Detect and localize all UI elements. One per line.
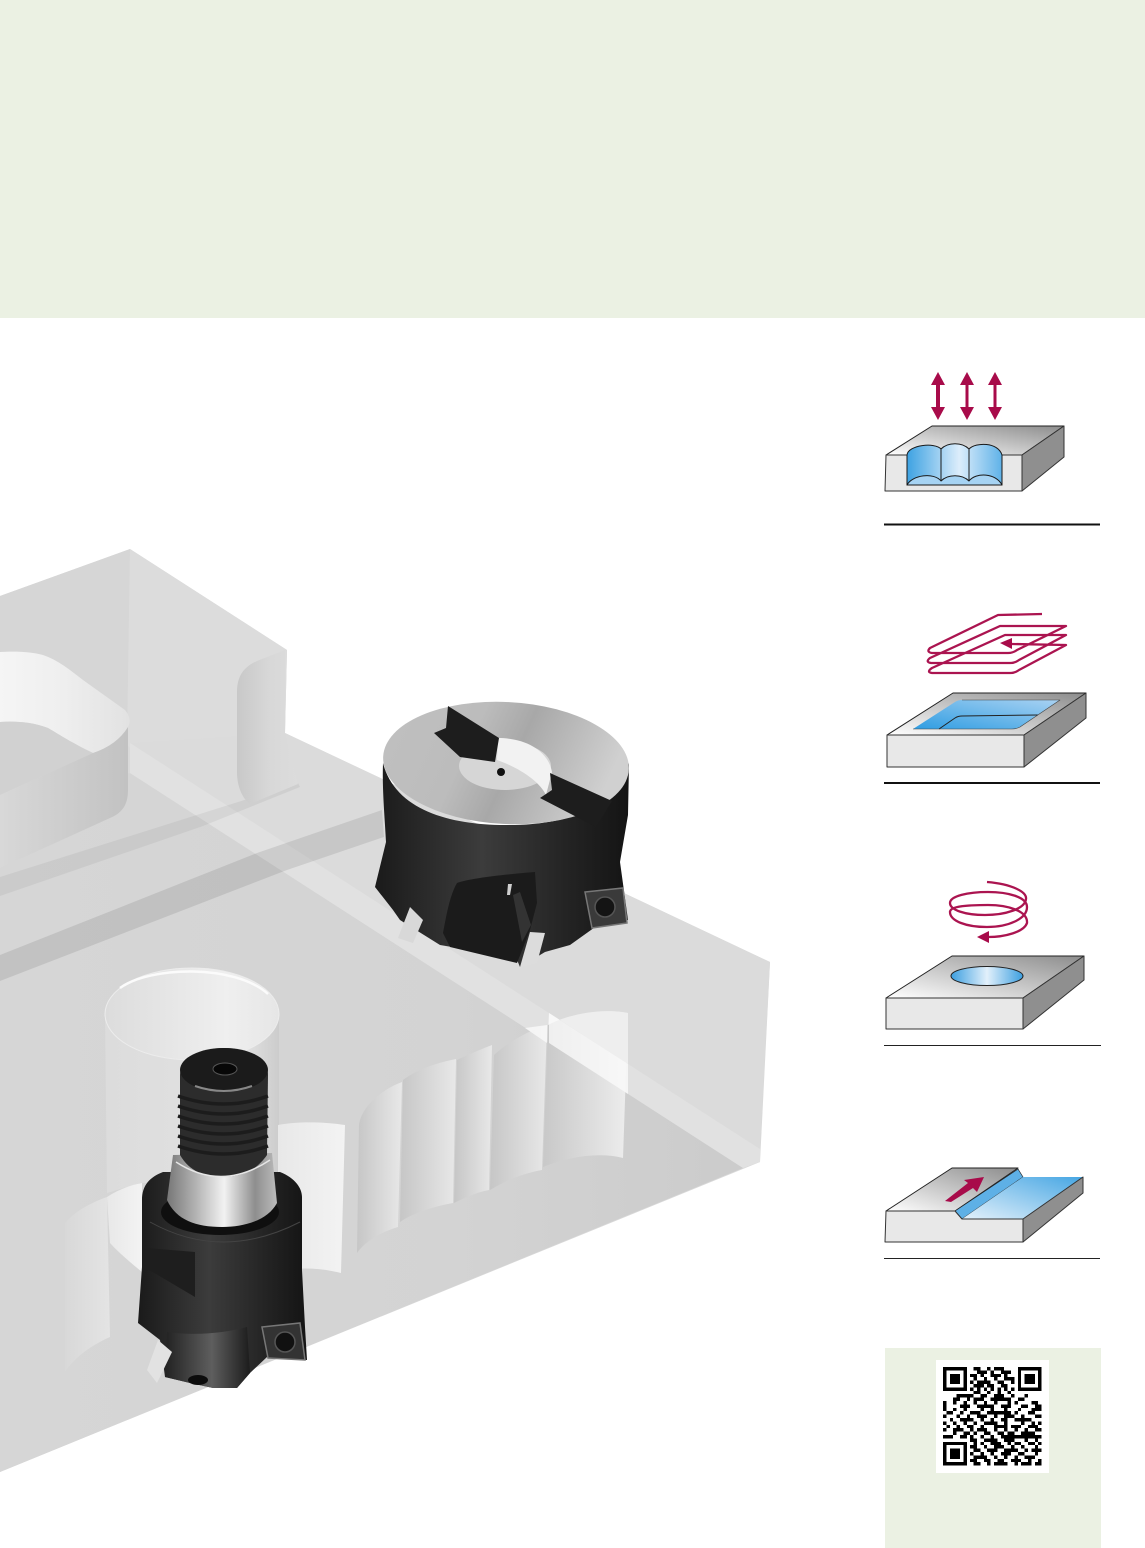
- body ledge highlight: [150, 1222, 300, 1242]
- arrows: [931, 372, 1002, 420]
- cutter body: [375, 763, 629, 967]
- side notch: [237, 650, 298, 804]
- right insert: [585, 888, 627, 928]
- machined surface: [962, 1177, 1083, 1219]
- light translucent diagonal band: [130, 743, 760, 1168]
- divider: [884, 1258, 1100, 1259]
- left insert: [398, 907, 423, 943]
- spiral tool path: [928, 614, 1066, 673]
- icon: shoulder milling: [885, 1168, 1083, 1242]
- block: [886, 426, 1064, 455]
- lower body highlight: [165, 1327, 250, 1388]
- QR panel: [885, 1348, 1101, 1548]
- feed arrow: [945, 1177, 984, 1202]
- flat: [146, 1248, 195, 1297]
- top surface: [886, 1168, 1018, 1211]
- threaded stud: [176, 1048, 270, 1177]
- pocket: [907, 444, 1002, 485]
- cutter: screw-fit end mill: [138, 1048, 307, 1388]
- screw hole: [188, 1375, 208, 1385]
- divider: [884, 524, 1100, 526]
- cutter body: [138, 1172, 307, 1388]
- insert pocket: [443, 872, 537, 963]
- pocket: [913, 700, 1060, 729]
- header band: [0, 0, 1145, 318]
- drive slot right: [540, 773, 612, 827]
- centre bore: [459, 738, 552, 795]
- front face: [0, 773, 743, 1472]
- QR backing: [936, 1360, 1049, 1473]
- block: [886, 956, 1084, 998]
- cutter: face mill with slotted top: [375, 696, 632, 967]
- upper back faces: [0, 549, 300, 820]
- band highlight on groove four: [525, 1025, 547, 1043]
- block body: [0, 549, 770, 1472]
- side face: [1023, 1177, 1083, 1242]
- drive slot left: [434, 706, 499, 762]
- top face: [380, 696, 632, 830]
- block: [887, 693, 1086, 735]
- middle insert: [520, 932, 545, 967]
- white insert: [147, 1340, 172, 1383]
- band highlight over grooves: [549, 1013, 628, 1094]
- black collar ring: [161, 1189, 279, 1235]
- illustration: transparent workpiece block: [0, 549, 770, 1472]
- dark translucent band 1: [0, 783, 300, 896]
- helix tool path: [950, 882, 1027, 943]
- panel background: [885, 1348, 1101, 1548]
- QR code: [943, 1369, 1042, 1464]
- large cylindrical bore: [105, 968, 279, 1193]
- icon: plunge milling: [885, 372, 1064, 491]
- top surface: [130, 733, 770, 1149]
- rounded pocket: [0, 652, 130, 868]
- right insert: [262, 1323, 305, 1360]
- bore: [951, 966, 1023, 986]
- blue slope: [955, 1169, 1023, 1219]
- silver collar: [167, 1153, 277, 1227]
- milled grooves along the front face: [65, 1011, 628, 1372]
- icon: helical interpolation: [886, 882, 1084, 1029]
- divider: [884, 782, 1100, 784]
- icon: pocket milling spiral: [887, 614, 1086, 767]
- dark translucent band 2: [0, 810, 384, 981]
- coolant highlight: [507, 884, 512, 895]
- pocket sliver: [513, 892, 531, 942]
- front face: [885, 1211, 1023, 1242]
- divider: [884, 1045, 1101, 1046]
- upper part of last groove: [548, 1011, 628, 1064]
